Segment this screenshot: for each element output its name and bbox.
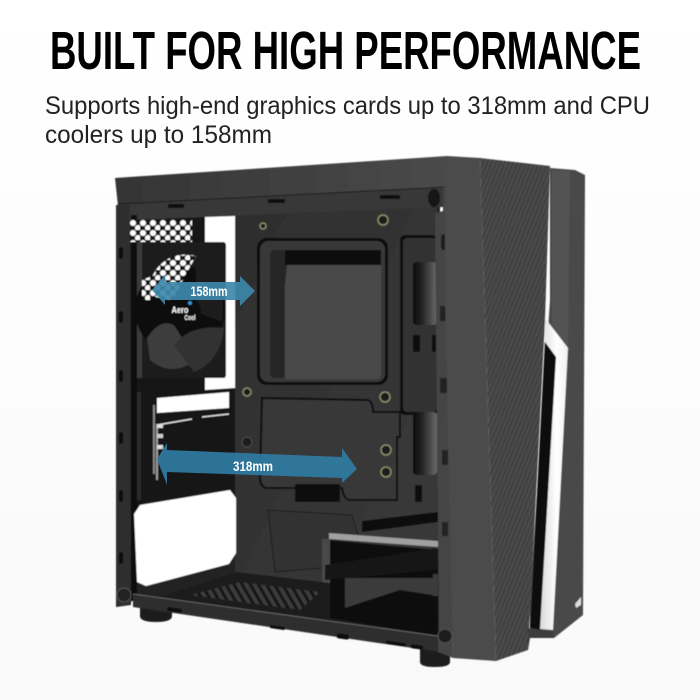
CPU cutout <box>257 238 388 385</box>
case floor <box>135 572 438 642</box>
arrow: 158mm: 158mm <box>190 283 228 299</box>
PSU opening <box>134 490 236 586</box>
right frame strip <box>435 187 453 658</box>
bottom edge of rear panel <box>528 628 554 650</box>
subtitle text block: Supports high-end graphics cards up to 318mm and CPU <box>45 92 650 120</box>
front black gap <box>530 340 556 630</box>
expansion area dark frame <box>137 216 235 520</box>
rear panel <box>530 168 585 638</box>
computer case <box>115 156 585 667</box>
screws <box>242 215 391 477</box>
top panel <box>115 156 447 222</box>
subtitle text block: coolers up to 158mm <box>45 121 272 149</box>
fan <box>135 242 226 378</box>
lower tray plate <box>260 398 400 572</box>
drive bay <box>322 512 438 636</box>
arrow: 158mm <box>152 275 255 306</box>
chassis back <box>117 186 440 640</box>
arrow: 318mm <box>157 443 357 485</box>
white accent stripe <box>540 318 568 630</box>
front panel <box>445 156 550 661</box>
foot: right <box>420 645 450 667</box>
white opening above fan <box>205 216 235 390</box>
left rail <box>116 205 137 607</box>
fan logo: Cool <box>184 315 196 322</box>
fan logo <box>167 295 201 329</box>
expansion slots <box>137 392 229 500</box>
bottom rail <box>133 594 440 652</box>
motherboard tray <box>235 207 438 637</box>
arrow: 318mm: 318mm <box>233 458 273 474</box>
rear mesh <box>130 220 192 242</box>
fan logo: Aero <box>172 305 189 315</box>
front logo <box>575 597 581 608</box>
foot: left <box>140 606 172 622</box>
right column panel <box>400 235 437 502</box>
subtitle text block <box>45 92 650 149</box>
